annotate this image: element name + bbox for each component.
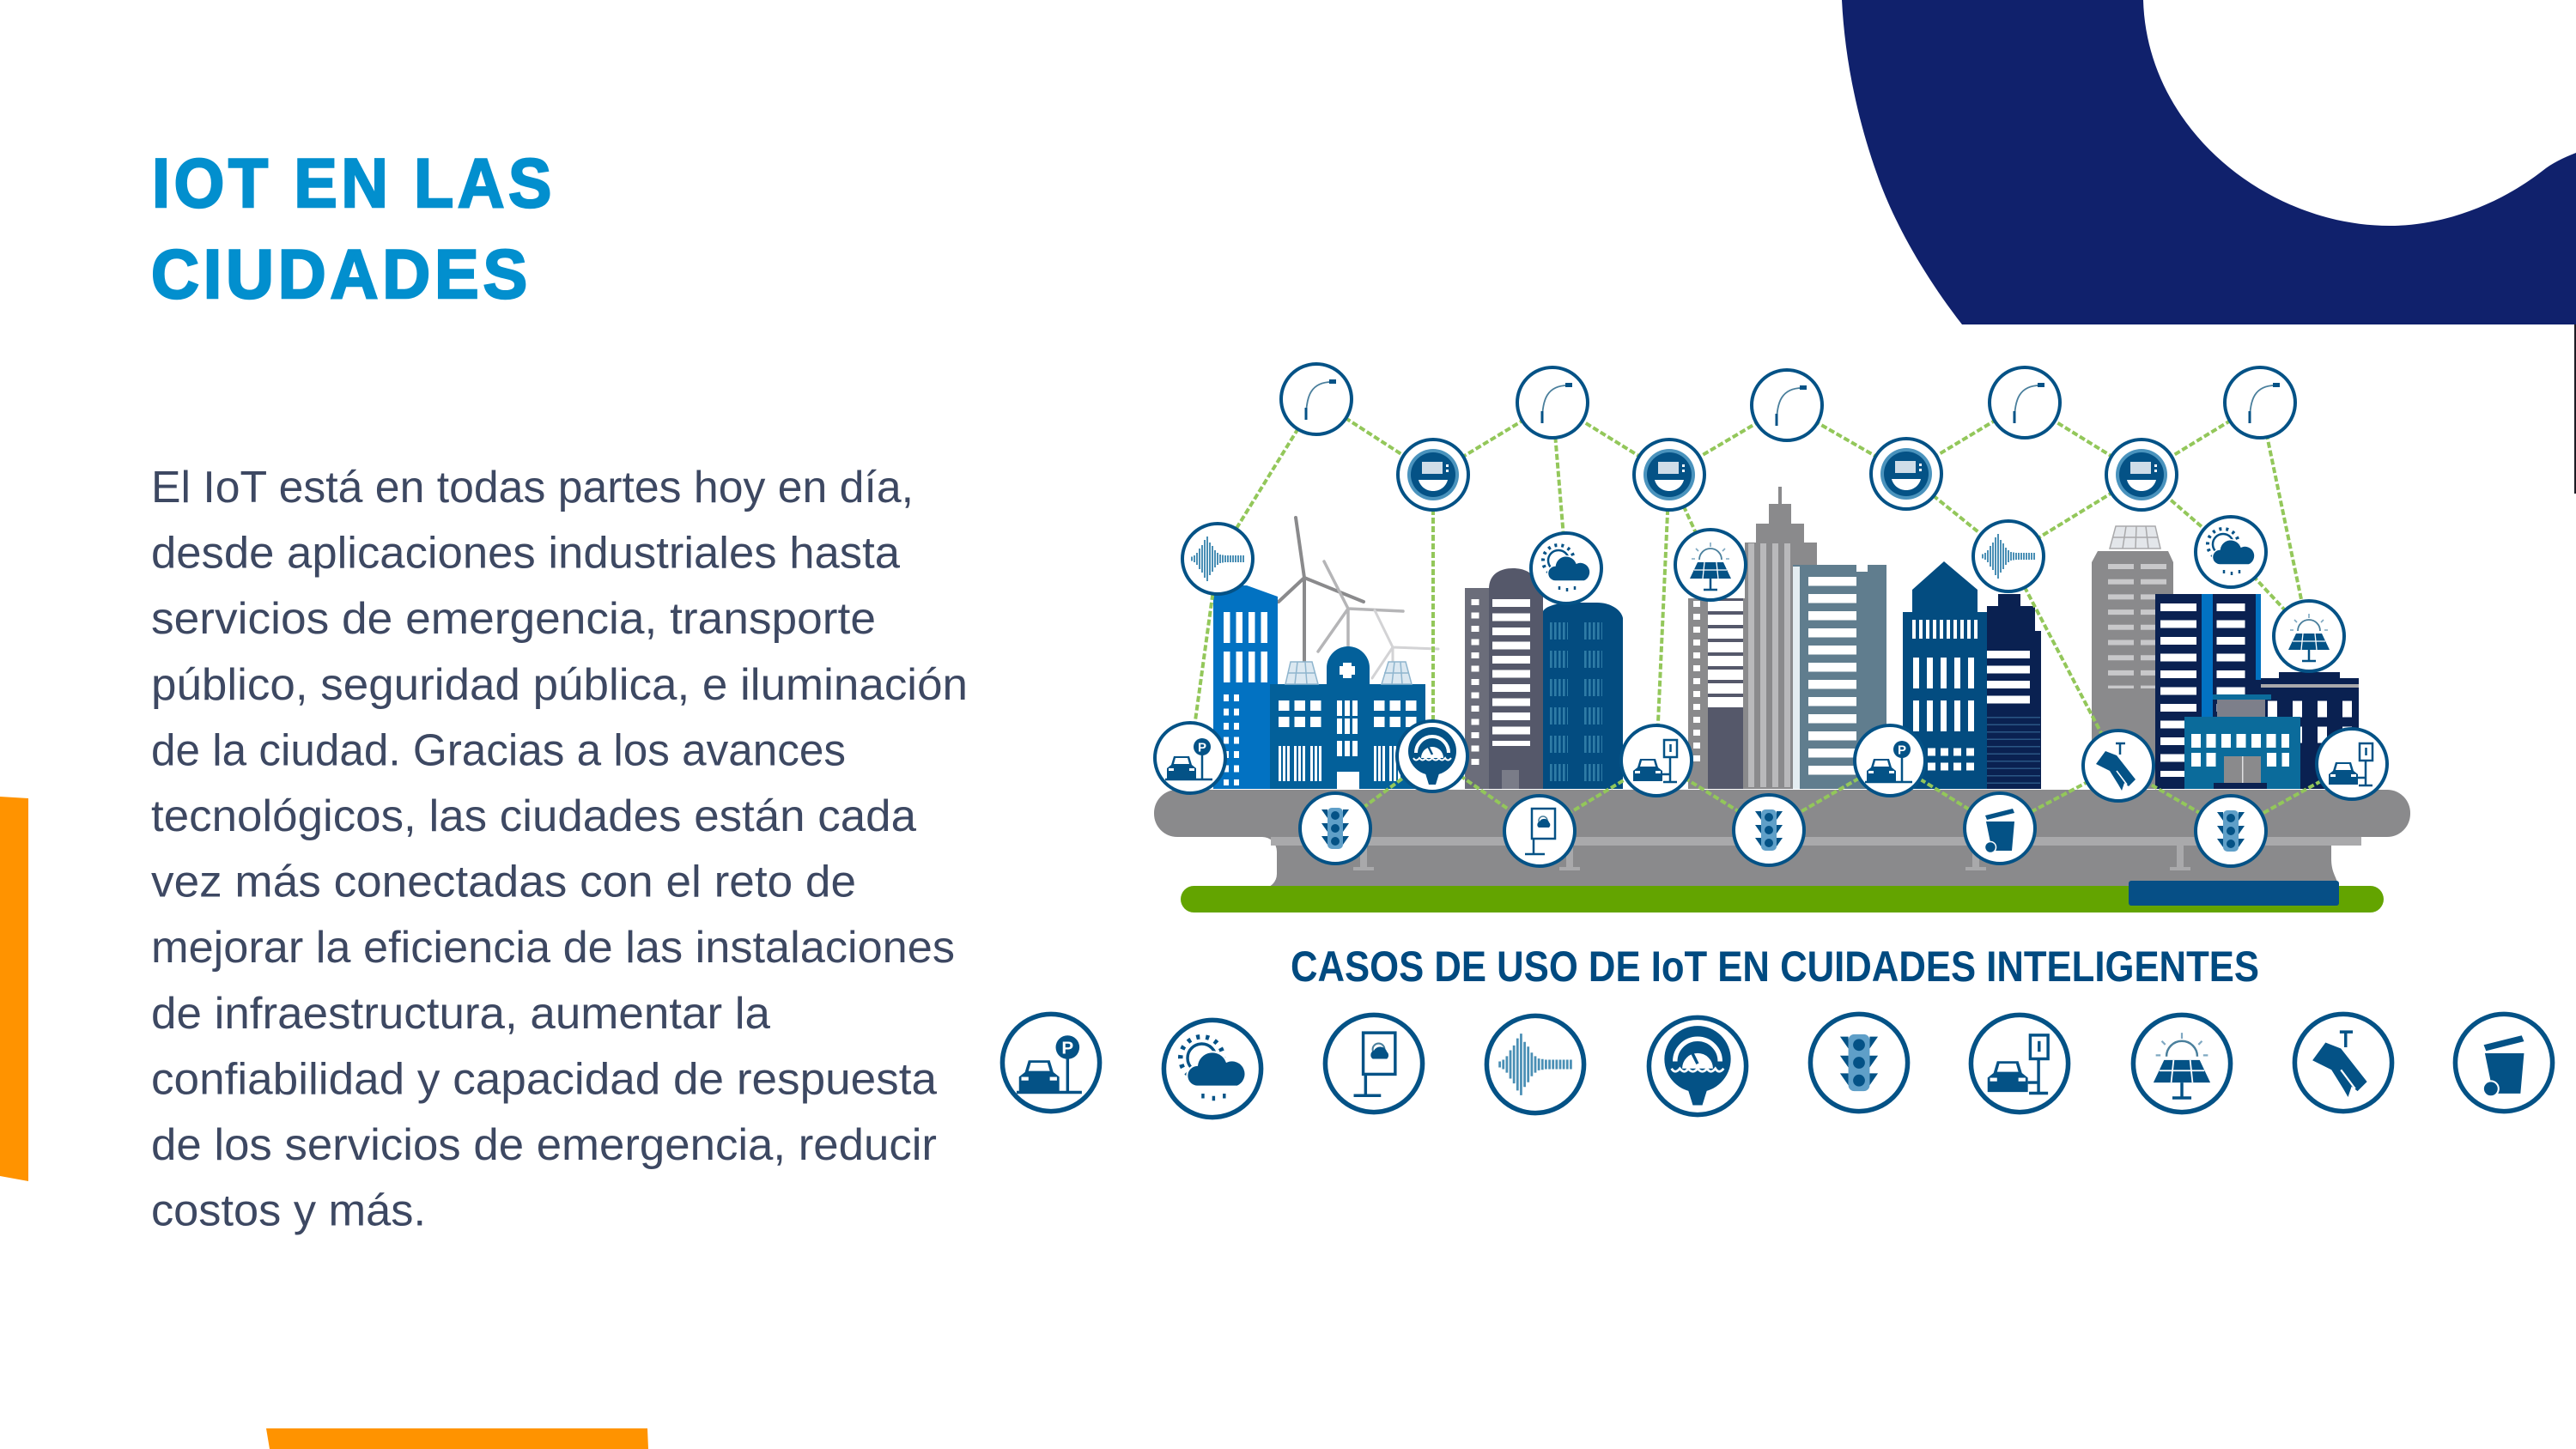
building: blue gabled tower — [1903, 561, 1987, 789]
body text block — [151, 463, 968, 1236]
building: tall grey skyscraper — [1745, 487, 1817, 789]
building: dark grey tower — [1465, 568, 1543, 789]
icon: weather station — [1531, 533, 1601, 603]
decorative navy blob, top right — [1842, 0, 2576, 324]
icon: seismic sensor — [1182, 524, 1253, 594]
body text block: desde aplicaciones industriales hasta — [151, 529, 900, 579]
legend icon: information post — [1325, 1015, 1423, 1113]
body text block: de la ciudad. Gracias a los avances — [151, 725, 846, 775]
title: IOT EN LAS — [152, 145, 556, 222]
icon: smart parking — [1855, 725, 1925, 796]
water strip — [2129, 881, 2339, 906]
icon: traffic light — [2196, 796, 2266, 866]
icon: smart meter — [1871, 439, 1941, 509]
icon: street lamp — [1752, 370, 1822, 440]
icon legend row — [1002, 1014, 2553, 1118]
icon: weather station — [2196, 517, 2266, 587]
wind turbines — [1279, 518, 1438, 678]
building: navy striped tower — [2155, 594, 2261, 789]
network connection lines — [1190, 399, 2352, 831]
body text block: tecnológicos, las ciudades están cada — [151, 791, 916, 841]
building: grey striped block — [1688, 598, 1745, 789]
legend icon: smart parking — [1002, 1014, 1100, 1112]
smart city illustration — [1154, 364, 2410, 912]
body text block: confiabilidad y capacidad de respuesta — [151, 1054, 937, 1104]
icon: solar panel — [2274, 601, 2344, 671]
thin dark line at right edge — [2574, 324, 2576, 494]
body text block: mejorar la eficiencia de las instalaciones — [151, 923, 955, 973]
building: small navy block — [2261, 672, 2359, 789]
legend icon: seismic sensor — [1486, 1016, 1584, 1113]
legend icon: water gauge — [1649, 1017, 1747, 1115]
icon: smart parking: P — [1198, 740, 1206, 755]
building: teal low block — [2184, 694, 2300, 789]
body text block: vez más conectadas con el reto de — [151, 858, 856, 907]
legend icon: traffic light — [1810, 1014, 1908, 1112]
icon: smart meter — [1634, 440, 1704, 510]
legend icon: weather station — [1163, 1020, 1261, 1118]
body text block: servicios de emergencia, transporte — [151, 594, 876, 644]
body text block: El IoT está en todas partes hoy en día, — [151, 463, 914, 512]
building: navy blue tower — [1543, 603, 1623, 789]
legend icon: solar panel — [2133, 1015, 2231, 1113]
icon: security camera — [2083, 731, 2154, 801]
icon: trash bin — [1965, 793, 2035, 864]
icon: traffic light — [1734, 795, 1804, 865]
icon: smart meter — [1398, 440, 1468, 510]
building: grey tower with rooftop solar — [2092, 526, 2173, 789]
building: bright blue tower — [1213, 585, 1278, 789]
elevated road — [1154, 790, 2410, 888]
icon: EV charger — [2317, 729, 2387, 799]
icon: street lamp — [1517, 367, 1588, 438]
legend icon: EV charger — [1971, 1015, 2069, 1113]
body text block: de infraestructura, aumentar la — [151, 989, 770, 1039]
icon: information post — [1504, 796, 1575, 866]
icon: street lamp — [1281, 364, 1352, 434]
building: hospital — [1270, 646, 1425, 789]
building: slate tower — [1793, 565, 1886, 789]
legend icon: security camera — [2294, 1014, 2392, 1112]
icon: smart parking: P — [1898, 743, 1906, 757]
icon: street lamp — [2225, 367, 2295, 438]
icon: EV charger — [1621, 725, 1692, 796]
decorative orange bar, bottom — [266, 1428, 648, 1449]
body text block: público, seguridad pública, e iluminación — [151, 660, 968, 710]
legend icon: smart parking: P — [1061, 1039, 1073, 1058]
icon: solar panel — [1675, 530, 1746, 600]
icon: smart meter — [2106, 440, 2177, 510]
icon: traffic light — [1300, 793, 1370, 864]
title — [151, 145, 556, 313]
icon: water gauge — [1397, 721, 1467, 791]
icon: street lamp — [1990, 367, 2060, 438]
icon: smart parking — [1155, 723, 1225, 793]
illustration heading: CASOS DE USO DE IoT EN CUIDADES INTELIGENTES — [1291, 943, 2259, 991]
icon: seismic sensor — [1973, 521, 2044, 591]
title: CIUDADES — [151, 236, 532, 313]
decorative orange bar, left edge — [0, 797, 28, 1181]
body text block: costos y más. — [151, 1186, 426, 1236]
building: dark navy tower — [1987, 594, 2041, 789]
grass strip — [1181, 886, 2384, 912]
rooftop solar panels on hospital — [1285, 662, 1412, 684]
legend icon: trash bin — [2455, 1014, 2553, 1112]
body text block: de los servicios de emergencia, reducir — [151, 1120, 937, 1170]
